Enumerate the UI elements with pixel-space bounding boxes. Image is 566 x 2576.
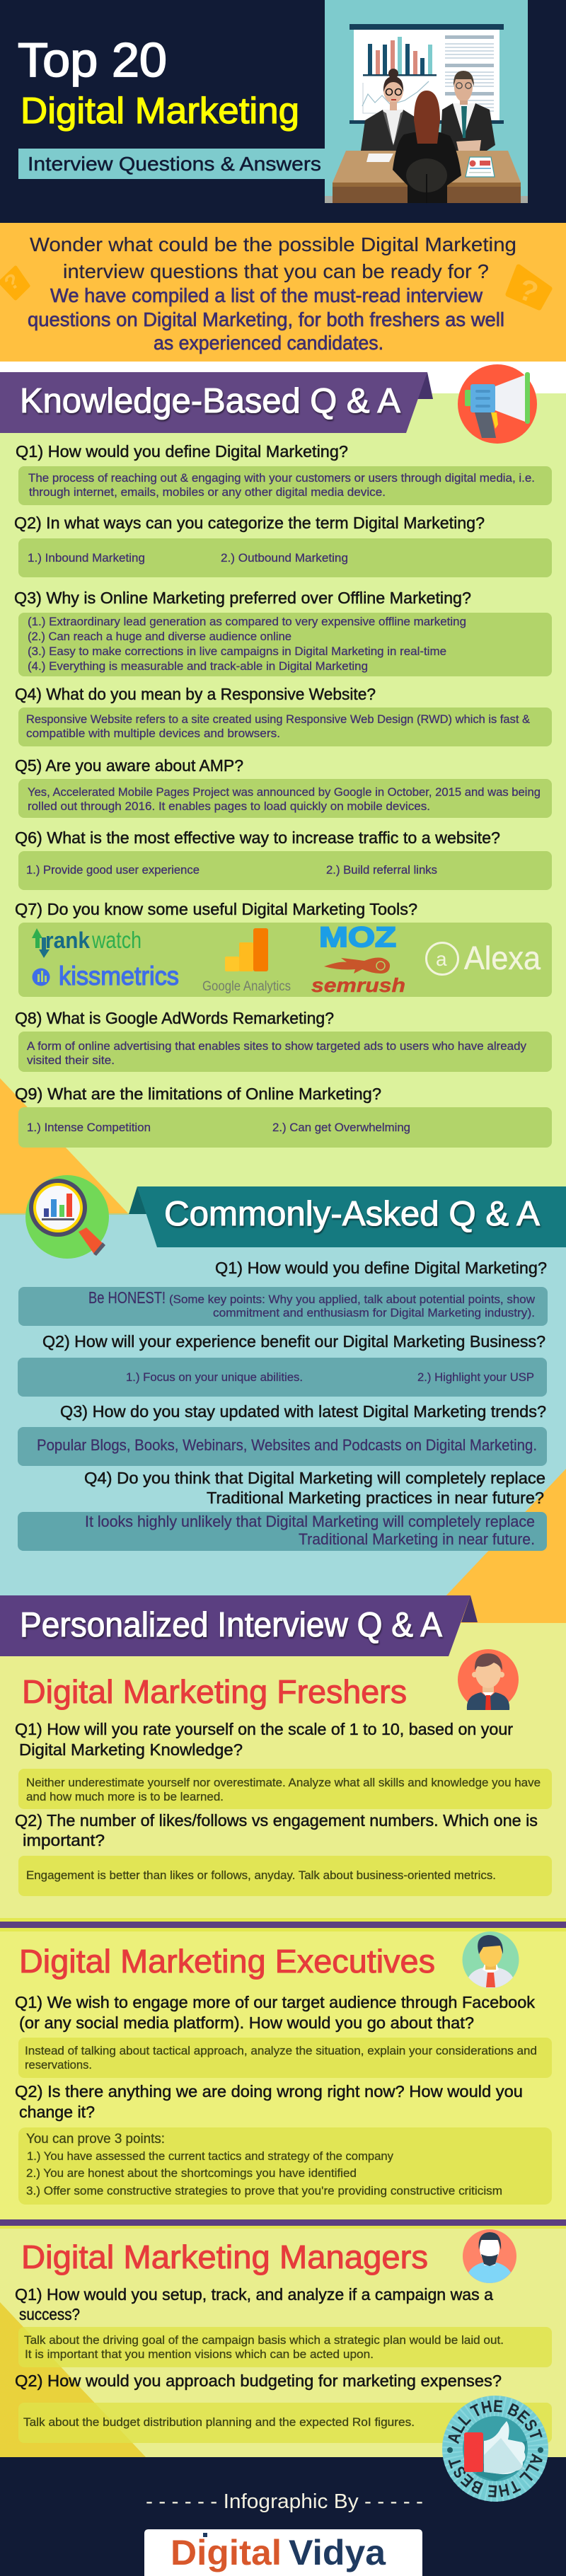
Q1: reservations. bbox=[25, 2059, 92, 2072]
illustration: interview scene bbox=[325, 0, 528, 203]
icon: right question diamond bbox=[508, 267, 550, 309]
panel: personalized section, freshers bbox=[0, 1595, 566, 1918]
Q2: Q2) The number of likes/follows vs engagement numbers. Which one is bbox=[15, 1811, 538, 1830]
panel: executives section bbox=[0, 1918, 566, 2229]
logo: SEMrush: semrush bbox=[311, 974, 405, 996]
icon: magnifier with chart bbox=[25, 1175, 109, 1259]
Q4: Q4) Do you think that Digital Marketing will completely replace bbox=[84, 1469, 545, 1487]
panel: header bbox=[0, 0, 566, 223]
Q8: A form of online advertising that enables sites to show targeted ads to users who have already bbox=[27, 1040, 527, 1053]
Q8 bbox=[15, 1009, 552, 1072]
intro text: questions on Digital Marketing, for both freshers as well bbox=[28, 308, 504, 330]
intro text: as experienced candidates. bbox=[154, 332, 383, 354]
Q2: Q2) How will your experience benefit our Digital Marketing Business? bbox=[42, 1332, 545, 1351]
Q4: It looks highly unlikely that Digital Marketing will completely replace bbox=[85, 1513, 535, 1530]
Q2: 1.) Inbound Marketing bbox=[28, 552, 145, 565]
title: Digital Marketing: Digital Marketing bbox=[21, 91, 299, 132]
logo: Moz: MOZ bbox=[319, 922, 396, 953]
panel: commonly-asked section bbox=[0, 1175, 566, 1623]
Q2 bbox=[18, 1332, 547, 1397]
Q2: 1.) Focus on your unique abilities. bbox=[126, 1371, 303, 1384]
interviewee bbox=[393, 91, 461, 203]
logo: Digital Vidya: Digital bbox=[171, 2533, 282, 2572]
Q1: Q1) How will you rate yourself on the scale of 1 to 10, based on your bbox=[15, 1720, 513, 1738]
Q6: 2.) Build referral links bbox=[326, 864, 437, 877]
Q1: Talk about the driving goal of the campaign basis which a strategic plan would be laid out. bbox=[24, 2334, 504, 2347]
avatar: fresher bbox=[458, 1649, 519, 1710]
Q2: 2.) Outbound Marketing bbox=[221, 552, 348, 565]
logo: rankwatch: rank bbox=[45, 928, 90, 953]
Q4: Q4) What do you mean by a Responsive Website? bbox=[15, 685, 376, 703]
badge: all the best: ALL THE BEST bbox=[448, 2400, 543, 2444]
Q1: and how much more is to be learned. bbox=[26, 1791, 224, 1803]
Q2: Q2) In what ways can you categorize the term Digital Marketing? bbox=[14, 514, 485, 532]
Q1: It is important that you mention visions which can be acted upon. bbox=[25, 2348, 374, 2361]
icon: right question diamond: ? bbox=[514, 272, 543, 309]
banner: Knowledge-Based Q & A: Knowledge-Based Q & A bbox=[20, 382, 400, 420]
Q3: Q3) How do you stay updated with latest Digital Marketing trends? bbox=[60, 1402, 546, 1421]
heading: Digital Marketing Executives: Digital Marketing Executives bbox=[19, 1943, 435, 1980]
Q3: Q3) Why is Online Marketing preferred over Offline Marketing? bbox=[14, 589, 471, 607]
Q1 bbox=[16, 442, 552, 505]
Q9: 2.) Can get Overwhelming bbox=[272, 1121, 410, 1134]
Q1 bbox=[15, 2285, 552, 2367]
icon: left question diamond: ? bbox=[0, 269, 24, 296]
Q1: Q1) We wish to engage more of our target audience through Facebook bbox=[15, 1993, 536, 2011]
Q2: Q2) How would you approach budgeting for marketing expenses? bbox=[15, 2372, 502, 2390]
Q6 bbox=[15, 828, 552, 890]
Q4: Traditional Marketing practices in near future? bbox=[207, 1489, 544, 1507]
Q4: compatible with multiple devices and browsers. bbox=[26, 727, 280, 740]
logo: Digital Vidya bbox=[144, 2529, 422, 2576]
logo: Alexa: Alexa bbox=[464, 940, 541, 976]
Q1: Be HONEST! bbox=[88, 1288, 166, 1307]
Q1: commitment and enthusiasm for Digital Marketing industry). bbox=[213, 1307, 535, 1319]
logo: Alexa: a bbox=[436, 948, 447, 970]
icon: megaphone bbox=[458, 364, 537, 444]
Q5: Q5) Are you aware about AMP? bbox=[15, 756, 243, 775]
subtitle bar bbox=[18, 149, 325, 179]
Q9: 1.) Intense Competition bbox=[27, 1121, 151, 1134]
heading: Digital Marketing Freshers: Digital Marketing Freshers bbox=[22, 1673, 407, 1710]
avatar: executive bbox=[463, 1931, 519, 1988]
Q1: (or any social media platform). How would you go about that? bbox=[19, 2014, 474, 2032]
logo: rankwatch bbox=[32, 927, 142, 958]
logo: Google Analytics: Google Analytics bbox=[202, 979, 291, 994]
intro text bbox=[28, 233, 516, 354]
Q7 bbox=[15, 900, 552, 997]
credit line: - - - - - - Infographic By - - - - - bbox=[146, 2490, 423, 2513]
Q2 bbox=[15, 1811, 552, 1896]
Q4: Responsive Website refers to a site created using Responsive Web Design (RWD) which is fast & bbox=[26, 713, 530, 726]
Q3: (1.) Extraordinary lead generation as compared to very expensive offline marketing bbox=[28, 616, 466, 628]
Q2: Talk about the budget distribution planning and the expected RoI figures. bbox=[23, 2416, 415, 2429]
logo: rankwatch: watch bbox=[91, 927, 142, 953]
intro text: interview questions that you can be ready for ? bbox=[63, 260, 489, 282]
intro text: We have compiled a list of the must-read interview bbox=[50, 284, 483, 306]
panel: knowledge-based section bbox=[0, 362, 566, 1214]
Q1: (Some key points: Why you applied, talk about potential points, show bbox=[169, 1293, 535, 1306]
Q2: important? bbox=[23, 1831, 105, 1849]
Q9 bbox=[15, 1085, 552, 1148]
Q3: (4.) Everything is measurable and track-able in Digital Marketing bbox=[28, 660, 368, 673]
Q1: Neither underestimate yourself nor overestimate. Analyze what all skills and knowledge you have bbox=[26, 1777, 541, 1789]
Q9: Q9) What are the limitations of Online Marketing? bbox=[15, 1085, 381, 1103]
heading: Digital Marketing Managers: Digital Marketing Managers bbox=[21, 2239, 428, 2275]
Q2: 2.) Highlight your USP bbox=[417, 1371, 534, 1384]
Q1 bbox=[15, 1720, 552, 1809]
Q4 bbox=[15, 685, 552, 746]
panel: footer bbox=[0, 2457, 566, 2576]
logo: Digital Vidya: Vidya bbox=[289, 2533, 386, 2572]
Q1 bbox=[15, 1993, 552, 2078]
Q1: Instead of talking about tactical approach, analyze the situation, explain your considerations and bbox=[25, 2045, 537, 2057]
Q2: Q2) Is there anything we are doing wrong right now? How would you bbox=[15, 2082, 523, 2101]
logo: Alexa bbox=[426, 940, 541, 976]
icon: thumbs up bbox=[464, 2421, 526, 2474]
Q3 bbox=[14, 589, 552, 676]
man interviewer bbox=[440, 71, 495, 151]
Q5: rolled out through 2016. It enables pages to load quickly on mobile devices. bbox=[28, 800, 430, 813]
logo: SEMrush bbox=[311, 958, 405, 996]
Q2: change it? bbox=[19, 2103, 95, 2121]
banner: Personalized Interview Q & A bbox=[0, 1595, 478, 1656]
Q2: 1.) You have assessed the current tactics and strategy of the company bbox=[27, 2150, 394, 2163]
banner: Commonly-Asked Q & A: Commonly-Asked Q & A bbox=[164, 1195, 540, 1233]
Q1: Q1) How would you setup, track, and analyze if a campaign was a bbox=[15, 2285, 493, 2304]
Q1: The process of reaching out & engaging with your customers or users through digital media, i.e. bbox=[28, 472, 535, 485]
Q4: Traditional Marketing in near future. bbox=[299, 1530, 535, 1548]
Q2: 3.) Offer some constructive strategies to prove that you're providing constructive criticism bbox=[26, 2185, 502, 2197]
Q4 bbox=[18, 1469, 547, 1551]
panel: managers section bbox=[0, 2229, 566, 2457]
Q2: 2.) You are honest about the shortcomings you have identified bbox=[26, 2167, 357, 2180]
Q2: Engagement is better than likes or follows, anyday. Talk about business-oriented metrics. bbox=[26, 1869, 496, 1882]
badge: all the best bbox=[442, 2396, 548, 2502]
logo: Google Analytics bbox=[202, 928, 291, 994]
Q7: Q7) Do you know some useful Digital Marketing Tools? bbox=[15, 900, 417, 918]
Q1: Q1) How would you define Digital Marketing? bbox=[16, 442, 348, 461]
Q1: Q1) How would you define Digital Marketing? bbox=[215, 1259, 547, 1277]
Q2: You can prove 3 points: bbox=[26, 2132, 165, 2147]
Q6: 1.) Provide good user experience bbox=[26, 864, 200, 877]
Q8: Q8) What is Google AdWords Remarketing? bbox=[15, 1009, 334, 1027]
Q2 bbox=[15, 2372, 552, 2443]
title: Top 20: Top 20 bbox=[18, 33, 167, 87]
Q2 bbox=[14, 514, 552, 577]
desk bbox=[333, 151, 521, 203]
woman interviewer bbox=[358, 69, 417, 160]
banner: Knowledge-Based Q & A bbox=[0, 372, 433, 433]
subtitle bar: Interview Questions & Answers bbox=[28, 153, 321, 175]
Q3 bbox=[18, 1402, 547, 1466]
banner: Commonly-Asked Q & A bbox=[129, 1186, 566, 1247]
Q5 bbox=[15, 756, 552, 818]
Q1: Digital Marketing Knowledge? bbox=[19, 1740, 243, 1759]
Q3: (3.) Easy to make corrections in live campaigns in Digital Marketing in real-time bbox=[28, 645, 446, 658]
panel: intro bbox=[0, 223, 566, 362]
badge: all the best: ALL THE BEST bbox=[448, 2454, 543, 2497]
logo: kissmetrics: kissmetrics bbox=[59, 961, 179, 990]
Q3: (2.) Can reach a huge and diverse audience online bbox=[28, 630, 291, 643]
intro text: Wonder what could be the possible Digital Marketing bbox=[30, 233, 516, 255]
banner: Personalized Interview Q & A: Personalized Interview Q & A bbox=[20, 1606, 442, 1644]
Q5: Yes, Accelerated Mobile Pages Project was announced by Google in October, 2015 and was being bbox=[28, 786, 541, 799]
avatar: manager bbox=[463, 2229, 516, 2283]
Q1: through internet, emails, mobiles or any other digital media device. bbox=[29, 486, 386, 499]
Q3: Popular Blogs, Books, Webinars, Websites and Podcasts on Digital Marketing. bbox=[37, 1436, 537, 1454]
Q2 bbox=[15, 2082, 552, 2205]
Q8: visited their site. bbox=[27, 1054, 115, 1067]
Q1: success? bbox=[19, 2305, 80, 2323]
Q1 bbox=[18, 1259, 548, 1326]
Q6: Q6) What is the most effective way to increase traffic to a website? bbox=[15, 828, 500, 847]
